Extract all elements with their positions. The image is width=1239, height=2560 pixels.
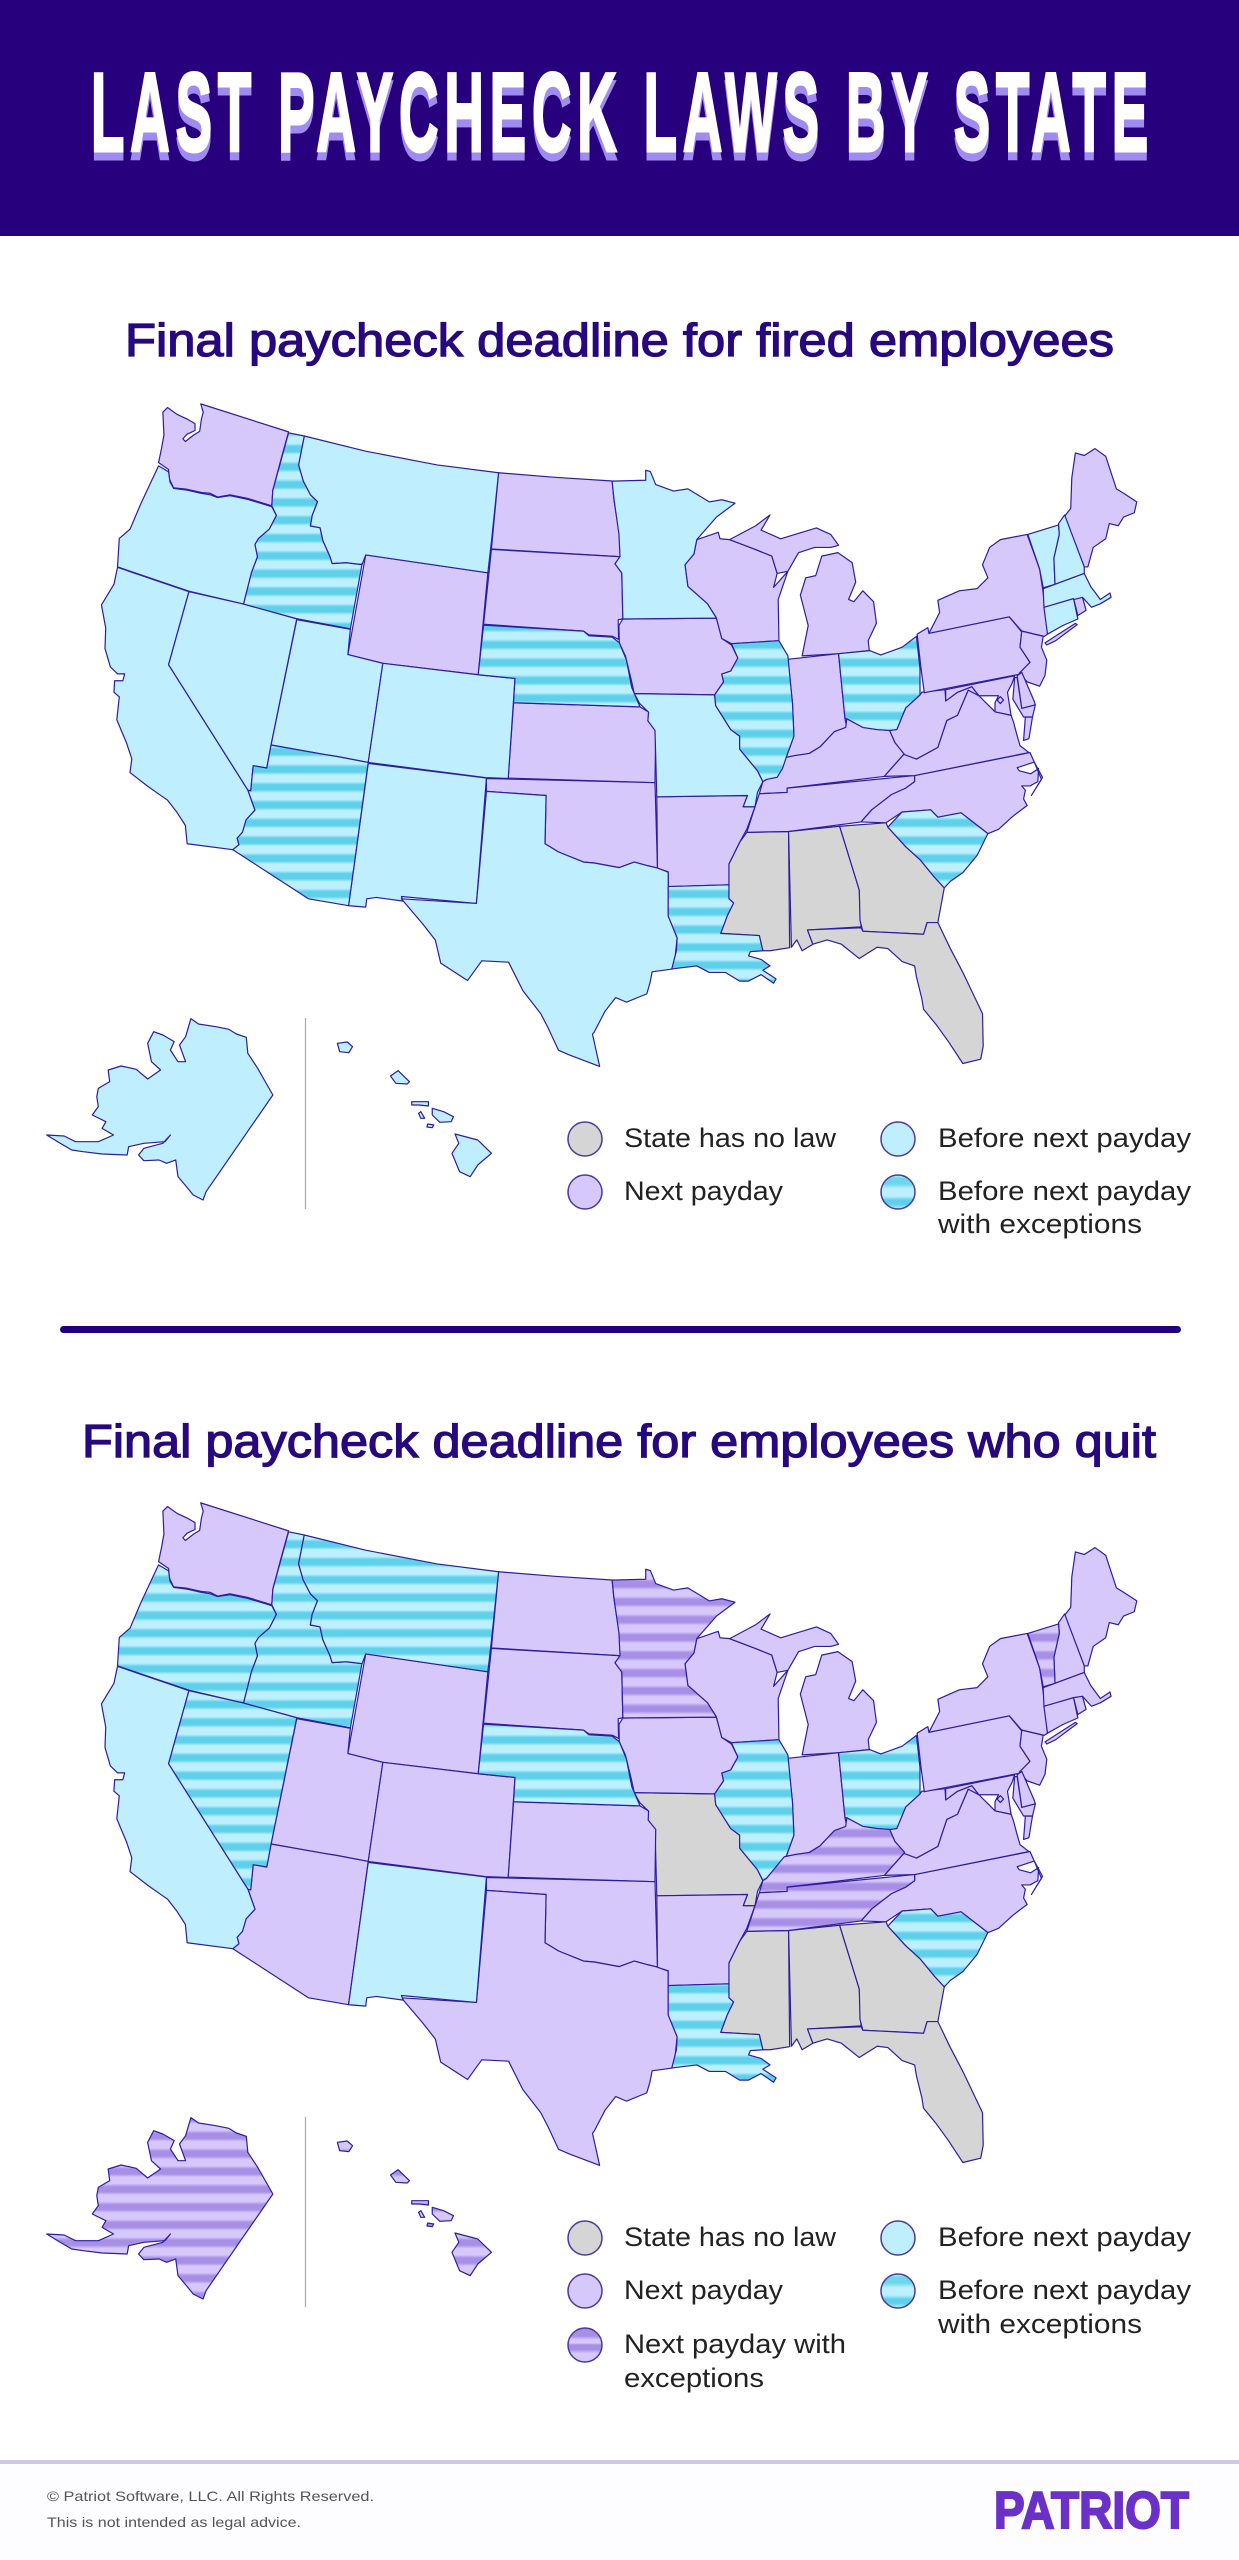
legend item: state has no law: State has no law xyxy=(624,2222,837,2252)
states: before next payday with exceptions, west xyxy=(233,433,640,906)
legend item: before next payday: Before next payday xyxy=(938,1123,1192,1153)
states: no law xyxy=(721,823,983,1063)
inset divider xyxy=(304,1018,306,1209)
Alaska xyxy=(47,1019,273,1200)
inset divider xyxy=(304,2117,306,2307)
legend item: before next payday with exceptions: with exceptions xyxy=(937,2309,1142,2339)
map: employees who quit xyxy=(47,1503,1137,2299)
section divider xyxy=(60,1326,1181,1333)
legend item: next payday with exceptions: Next payday with xyxy=(624,2329,846,2359)
legend item: next payday xyxy=(568,1175,784,1209)
states: before next payday xyxy=(101,436,1111,1066)
logo: Patriot: PATRIOT xyxy=(994,2482,1189,2540)
copyright: © Patriot Software, LLC. All Rights Reserved. xyxy=(47,2488,374,2504)
states: next payday xyxy=(159,404,1137,887)
states: before next payday xyxy=(101,1666,486,2006)
legend item: before next payday xyxy=(881,1122,1192,1156)
legend item: before next payday with exceptions xyxy=(881,1175,1192,1239)
states: before next payday with exceptions, east xyxy=(668,1735,988,2082)
legend item: before next payday with exceptions xyxy=(881,2274,1192,2339)
legend item: next payday: Next payday xyxy=(624,2275,784,2305)
states: before next payday with exceptions, east xyxy=(668,636,988,983)
legend item: state has no law: State has no law xyxy=(624,1123,837,1153)
states: no law xyxy=(634,1793,983,2162)
Hawaii xyxy=(337,2141,491,2276)
legend item: next payday with exceptions: exceptions xyxy=(624,2363,764,2393)
states: next payday with exceptions xyxy=(612,1569,1059,1931)
legend item: before next payday with exceptions: Before next payday xyxy=(938,2275,1192,2305)
legend item: state has no law xyxy=(568,2221,837,2255)
states: next payday xyxy=(159,1503,1137,2165)
Hawaii xyxy=(337,1042,491,1177)
legend item: next payday with exceptions xyxy=(568,2328,846,2393)
legend: employees who quit xyxy=(568,2221,1192,2393)
legend item: next payday xyxy=(568,2274,784,2308)
heading: employees who quit: Final paycheck deadline for employees who quit xyxy=(82,1415,1156,1467)
legend item: before next payday with exceptions: with exceptions xyxy=(937,1209,1142,1239)
legend item: next payday: Next payday xyxy=(624,1176,784,1206)
legend item: before next payday xyxy=(881,2221,1192,2255)
Alaska xyxy=(47,2118,273,2299)
states: before next payday with exceptions, west xyxy=(117,1532,640,1890)
legend item: before next payday: Before next payday xyxy=(938,2222,1192,2252)
disclaimer: This is not intended as legal advice. xyxy=(47,2514,301,2530)
legend item: state has no law xyxy=(568,1122,837,1156)
legend item: before next payday with exceptions: Before next payday xyxy=(938,1176,1192,1206)
map: fired employees xyxy=(47,404,1137,1200)
footer xyxy=(0,2460,1239,2560)
header band xyxy=(0,0,1239,236)
legend: fired employees xyxy=(568,1122,1192,1239)
heading: fired employees: Final paycheck deadline for fired employees xyxy=(125,314,1114,366)
